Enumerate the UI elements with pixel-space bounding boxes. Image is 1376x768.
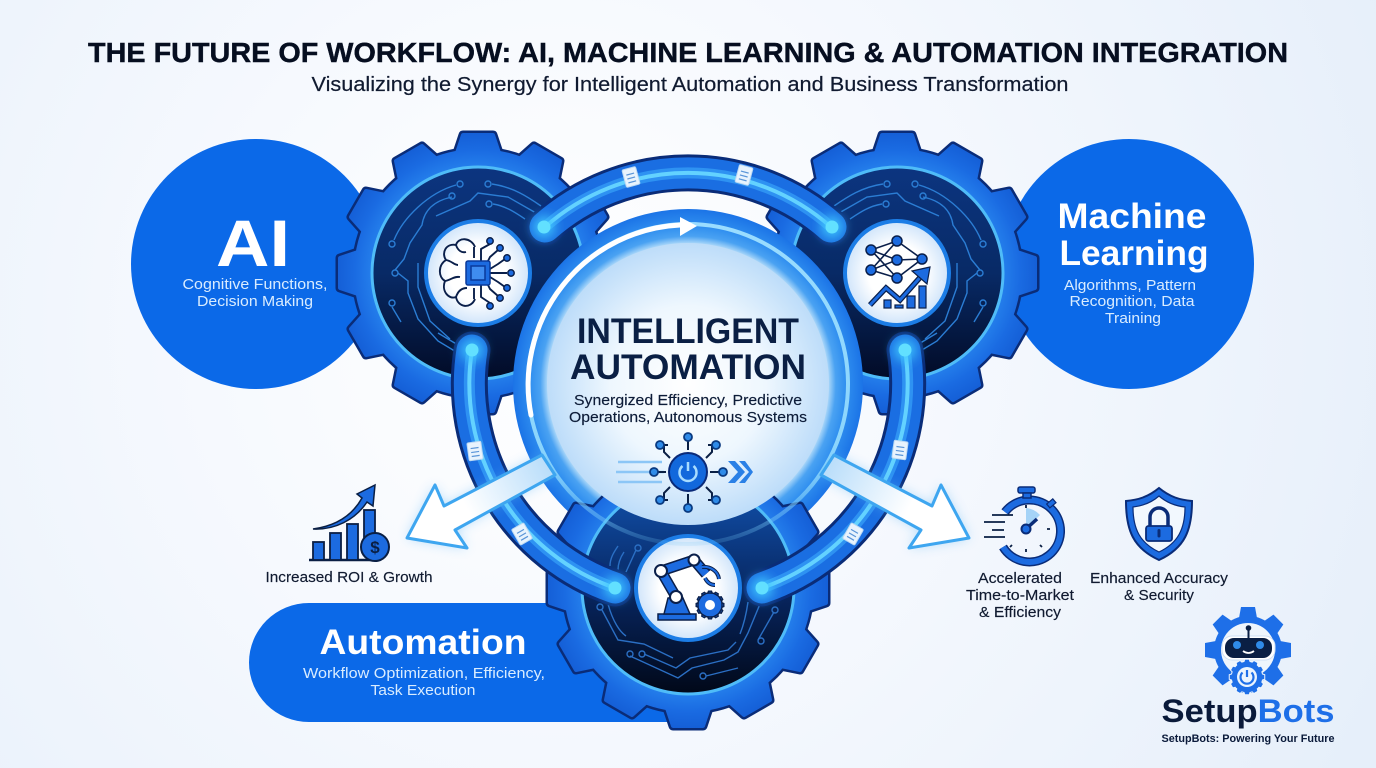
panel: Automation pill <box>249 603 680 722</box>
gear: Machine Learning <box>759 135 1035 411</box>
icon: stopwatch <box>984 487 1061 562</box>
pipe: right arc <box>762 350 908 588</box>
document icons on pipes <box>467 164 908 545</box>
icon: shield with lock <box>1126 488 1192 560</box>
subtitle: Visualizing the Synergy for Intelligent Automation and Business Transformation <box>312 74 1068 96</box>
logo wordmark: SetupBots <box>1162 693 1334 729</box>
Machine Learning label: Learning <box>1060 234 1208 273</box>
Machine Learning label: Algorithms, Pattern <box>1064 278 1196 294</box>
arrow: right output <box>821 455 969 548</box>
Automation label <box>303 623 545 699</box>
arrow: left output <box>407 455 555 548</box>
hub: Automation robot arm icon <box>636 536 740 640</box>
central circle: AUTOMATION <box>570 348 806 387</box>
panel: AI circle <box>131 139 381 389</box>
Automation label: Workflow Optimization, Efficiency, <box>303 666 545 682</box>
ROI label: Increased ROI & Growth <box>266 570 432 586</box>
icon: ROI growth chart: $ <box>370 538 380 557</box>
label: time to market: Accelerated <box>978 571 1062 587</box>
pipe: left arc <box>469 350 615 588</box>
label: accuracy and security: Enhanced Accuracy <box>1090 571 1229 587</box>
label: accuracy and security <box>1090 571 1229 604</box>
central description: Synergized Efficiency, Predictive <box>574 392 802 409</box>
label: time to market: & Efficiency <box>979 605 1062 621</box>
central heading: INTELLIGENT <box>577 312 799 351</box>
hub: Machine Learning network icon <box>845 221 949 325</box>
title block <box>88 37 1288 96</box>
pipe: top arc <box>545 173 831 227</box>
AI label: Decision Making <box>197 294 313 310</box>
glowing pipe end points <box>461 216 916 599</box>
Machine Learning label: Recognition, Data <box>1070 294 1196 310</box>
Automation label: Automation <box>320 623 526 662</box>
Machine Learning label: Machine <box>1058 197 1206 236</box>
logo tagline: SetupBots: Powering Your Future <box>1162 733 1334 745</box>
icon: ROI growth chart <box>309 485 389 561</box>
Machine Learning label: Training <box>1105 311 1161 327</box>
label: accuracy and security: & Security <box>1124 588 1195 604</box>
hub: AI brain icon <box>426 221 530 325</box>
panel: Machine Learning circle <box>1004 139 1254 389</box>
label: time to market: Time-to-Market <box>966 588 1074 604</box>
central circle: Operations, Autonomous Systems <box>569 409 807 426</box>
AI label: Cognitive Functions, <box>182 277 328 293</box>
label: time to market <box>966 571 1074 621</box>
logo: SetupBots robot gear <box>1205 607 1291 694</box>
central outer ring <box>513 209 863 559</box>
Machine Learning label <box>1058 197 1208 327</box>
central circle <box>547 243 829 525</box>
Automation label: Task Execution <box>370 683 476 699</box>
gear: AI <box>340 135 616 411</box>
central light ring with arrow <box>528 217 848 544</box>
AI label <box>182 206 328 310</box>
main title: THE FUTURE OF WORKFLOW: AI, MACHINE LEARNING & AUTOMATION INTEGRATION <box>88 37 1288 68</box>
AI label: AI <box>216 206 290 280</box>
gear: Automation <box>550 450 826 726</box>
icon: power network <box>616 433 753 512</box>
